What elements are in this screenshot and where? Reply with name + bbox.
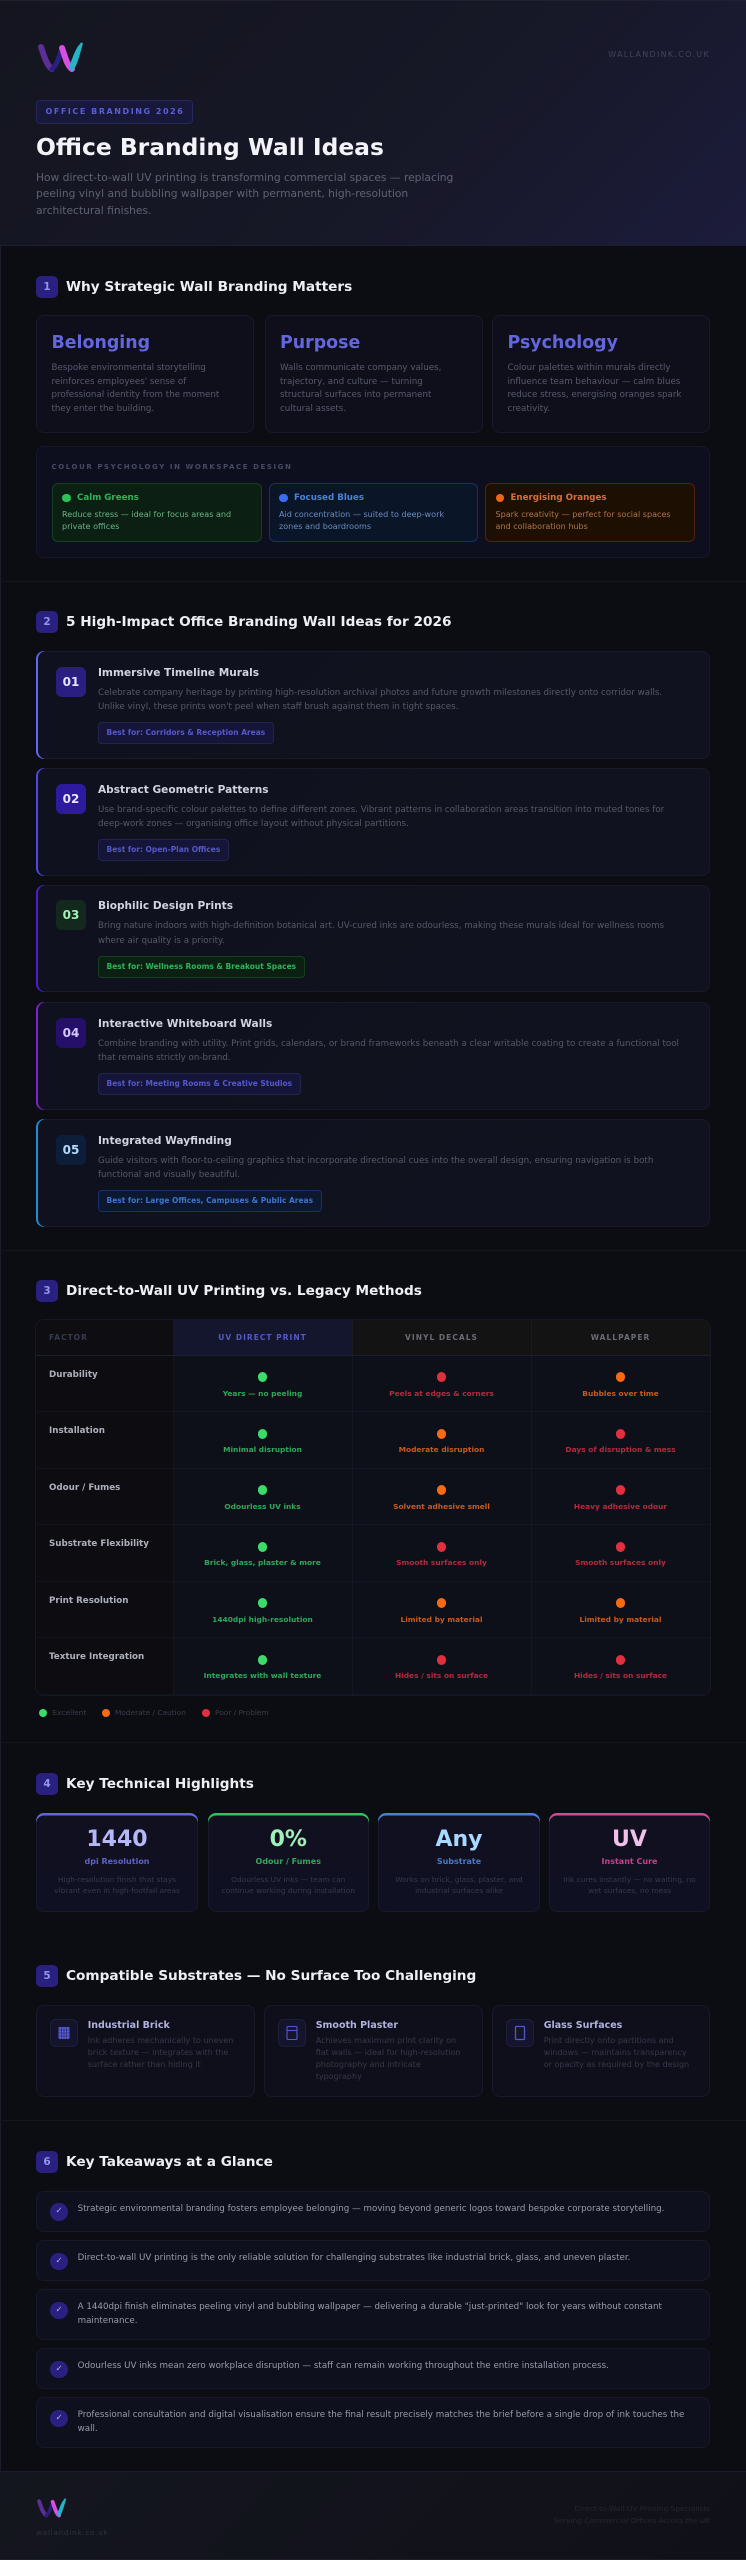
factor: Texture Integration — [49, 1652, 144, 1662]
vinyl cell: Smooth surfaces only — [396, 1558, 487, 1567]
title: Office Branding Wall Ideas — [36, 133, 384, 161]
card title: Belonging — [52, 333, 150, 353]
green dot — [62, 494, 70, 502]
legend dot poor — [202, 1709, 210, 1717]
takeaway 3 — [36, 2289, 710, 2340]
swatch text: zones and boardrooms — [279, 522, 371, 530]
idea body: Use brand-specific colour palettes to define different zones. Vibrant patterns in collaboration areas transition into muted tones for — [98, 805, 664, 815]
best-for pill: Best for: Meeting Rooms & Creative Studios — [106, 1079, 292, 1088]
row: durability — [36, 1356, 710, 1412]
idea body: deep-work zones — organising office layout without physical partitions. — [98, 819, 409, 829]
footer — [0, 2471, 746, 2560]
card title: Industrial Brick — [88, 2020, 170, 2031]
swatch: focused blues — [268, 483, 478, 542]
check icon: ✓ — [55, 2206, 63, 2216]
best-for pill — [98, 1073, 301, 1095]
card title: Purpose — [280, 333, 360, 353]
icon: brick grid — [50, 2019, 78, 2047]
row: installation — [36, 1412, 710, 1469]
number — [56, 784, 86, 814]
wallpaper cell — [531, 1582, 710, 1638]
card text: or opacity as required by the design — [544, 2060, 689, 2069]
card text: brick texture — integrates with the — [88, 2048, 228, 2057]
best-for pill: Best for: Large Offices, Campuses & Public Areas — [106, 1196, 313, 1205]
idea body — [98, 688, 662, 712]
check icon — [50, 2410, 68, 2427]
header: factor: FACTOR — [49, 1333, 88, 1342]
label: dpi Resolution — [84, 1857, 150, 1866]
legend text moderate: Moderate / Caution — [115, 1708, 186, 1717]
legend dot excellent — [39, 1709, 47, 1717]
label: Odour / Fumes — [256, 1857, 321, 1866]
card text: photography and intricate — [316, 2060, 421, 2069]
card body — [280, 363, 441, 414]
swatch: calm greens — [52, 483, 262, 542]
takeaway 4 — [36, 2348, 710, 2389]
vinyl cell — [352, 1525, 531, 1582]
uv cell: Brick, glass, plaster & more — [204, 1558, 321, 1567]
uv cell — [173, 1582, 352, 1638]
substrate card: plaster — [264, 2005, 483, 2097]
number: 04 — [63, 1026, 79, 1040]
card text: surface rather than hiding it — [88, 2060, 201, 2069]
legend text poor: Poor / Problem — [215, 1708, 269, 1717]
header: uv direct print — [173, 1320, 352, 1355]
swatch text: Aid concentration — suited to deep-work — [279, 510, 444, 519]
best-for pill — [98, 956, 305, 978]
best-for pill — [98, 722, 274, 744]
panel: belonging — [36, 315, 254, 433]
takeaway text: Odourless UV inks mean zero workplace disruption — staff can remain working throughout the entire installation process. — [78, 2361, 609, 2371]
card title: Smooth Plaster — [316, 2020, 398, 2031]
wallpaper cell — [531, 1638, 710, 1695]
heading text: Direct-to-Wall UV Printing vs. Legacy Methods — [66, 1283, 422, 1299]
swatch text: and collaboration hubs — [496, 522, 588, 530]
check icon: ✓ — [55, 2304, 63, 2314]
wallpaper cell: Days of disruption & mess — [565, 1445, 676, 1454]
check icon — [50, 2360, 68, 2378]
section 2 heading — [36, 611, 451, 633]
value: UV — [612, 1826, 647, 1852]
number badge — [36, 2151, 58, 2173]
vinyl cell: Moderate disruption — [399, 1445, 484, 1454]
legend text excellent: Excellent — [52, 1708, 86, 1717]
idea title: Interactive Whiteboard Walls — [98, 1018, 272, 1030]
idea title: Abstract Geometric Patterns — [98, 784, 269, 796]
header: wallpaper — [531, 1320, 710, 1355]
best-for pill: Best for: Wellness Rooms & Breakout Spaces — [106, 962, 296, 970]
stat: 0% odour — [208, 1812, 369, 1912]
row: print resolution — [36, 1582, 710, 1638]
idea body — [98, 1039, 679, 1063]
number — [56, 1018, 86, 1048]
subtitle: How direct-to-wall UV printing is transforming commercial spaces — replacing — [36, 171, 453, 184]
card text — [88, 2036, 233, 2069]
number — [56, 900, 86, 930]
table header row — [36, 1320, 710, 1356]
idea body: Celebrate company heritage by printing high-resolution archival photos and future growth milestones directly onto corridor walls. — [98, 688, 662, 698]
uv cell — [173, 1525, 352, 1582]
number badge — [36, 276, 58, 298]
idea body: Guide visitors with floor-to-ceiling graphics that incorporate directional cues into the overall design, ensuring navigation is both — [98, 1156, 653, 1166]
check icon — [50, 2203, 68, 2221]
card title: Psychology — [508, 333, 618, 353]
heading text: 5 High-Impact Office Branding Wall Ideas for 2026 — [66, 614, 451, 630]
label: Instant Cure — [602, 1857, 657, 1866]
uv cell — [173, 1638, 352, 1695]
description — [222, 1875, 355, 1895]
subtitle — [36, 171, 453, 217]
uv cell: Minimal disruption — [223, 1445, 302, 1454]
idea card 04 — [36, 1002, 710, 1110]
number badge — [36, 1280, 58, 1302]
number badge: 2 — [43, 616, 51, 628]
uv cell — [173, 1469, 352, 1525]
check icon — [50, 2252, 68, 2270]
check icon: ✓ — [55, 2412, 63, 2422]
wallpaper cell: Smooth surfaces only — [575, 1558, 666, 1567]
vinyl cell: Limited by material — [400, 1615, 483, 1624]
best-for pill: Best for: Corridors & Reception Areas — [106, 728, 265, 737]
factor: Print Resolution — [49, 1596, 128, 1606]
subtitle: peeling vinyl and bubbling wallpaper with permanent, high-resolution — [36, 187, 408, 200]
vinyl cell — [352, 1469, 531, 1525]
header: wallpaper: WALLPAPER — [591, 1333, 650, 1342]
uv cell: Integrates with wall texture — [204, 1671, 321, 1680]
number badge: 5 — [43, 1970, 51, 1982]
description — [395, 1875, 523, 1895]
card body: trajectory, and culture — turning — [280, 377, 423, 387]
value: 1440 — [86, 1826, 148, 1852]
heading text: Compatible Substrates — No Surface Too Challenging — [66, 1968, 476, 1984]
icon: footer logo — [37, 2498, 66, 2518]
substrate card: brick — [36, 2005, 255, 2097]
wallpaper cell: Heavy adhesive odour — [574, 1502, 667, 1511]
vinyl cell — [352, 1582, 531, 1638]
factor: Installation — [49, 1426, 105, 1436]
legend dot moderate — [102, 1709, 110, 1717]
wallpaper cell: Hides / sits on surface — [574, 1671, 667, 1680]
uv cell: Odourless UV inks — [224, 1502, 301, 1511]
description — [563, 1875, 696, 1895]
card text: flat walls — ideal for high-resolution — [316, 2048, 460, 2057]
value: Any — [435, 1826, 483, 1852]
number: 05 — [63, 1143, 79, 1157]
takeaway 1 — [36, 2191, 710, 2232]
description: Odourless UV inks — team can — [231, 1875, 345, 1884]
section 3 heading — [36, 1280, 422, 1302]
check icon — [50, 2302, 68, 2319]
number badge — [36, 1773, 58, 1795]
factor: Durability — [49, 1370, 98, 1380]
description: Works on brick, glass, plaster, and — [395, 1875, 523, 1884]
idea body: Unlike vinyl, these prints won't peel when staff brush against them in tight spaces. — [98, 702, 458, 712]
website label: WALLANDINK.CO.UK — [608, 50, 710, 59]
number badge: 1 — [43, 281, 51, 293]
description: industrial surfaces alike — [415, 1886, 503, 1895]
check icon: ✓ — [55, 2364, 63, 2374]
best-for pill — [98, 1190, 322, 1212]
swatch title: Energising Oranges — [510, 493, 607, 503]
vinyl cell — [352, 1412, 531, 1469]
card body: they enter the building. — [52, 404, 154, 414]
number badge — [36, 1965, 58, 1987]
number badge: 6 — [43, 2156, 51, 2168]
description: Ink cures instantly — no waiting, no — [563, 1875, 696, 1884]
stat: uv instant cure — [549, 1812, 710, 1912]
card text — [316, 2036, 460, 2081]
row: texture integration — [36, 1638, 710, 1695]
takeaway text — [78, 2410, 684, 2434]
row: odour — [36, 1469, 710, 1525]
factor: Odour / Fumes — [49, 1483, 120, 1493]
swatch text — [279, 510, 444, 530]
idea card 05 — [36, 1119, 710, 1226]
card body: Bespoke environmental storytelling — [52, 363, 206, 373]
footer tagline: Direct-to-Wall UV Printing Specialists — [574, 2504, 710, 2513]
card text: Ink adheres mechanically to uneven — [88, 2036, 233, 2045]
orange dot — [496, 494, 504, 502]
check icon: ✓ — [55, 2256, 63, 2266]
blue dot — [279, 494, 288, 502]
swatch title: Calm Greens — [77, 493, 139, 503]
takeaway 2 — [36, 2240, 710, 2281]
card body — [52, 363, 220, 414]
description: wet surfaces, no mess — [588, 1886, 671, 1895]
card body: cultural assets. — [280, 404, 346, 414]
vinyl cell: Hides / sits on surface — [395, 1671, 488, 1680]
uv cell: Years — no peeling — [223, 1389, 302, 1398]
swatch text: private offices — [62, 522, 119, 530]
number — [56, 1135, 86, 1165]
card body: Colour palettes within murals directly — [508, 363, 671, 373]
swatch title: Focused Blues — [294, 493, 364, 503]
idea body — [98, 921, 664, 946]
section 1 heading — [36, 276, 352, 298]
idea title: Integrated Wayfinding — [98, 1134, 232, 1146]
idea title: Biophilic Design Prints — [98, 900, 233, 912]
number — [56, 667, 86, 697]
section 4 heading — [36, 1773, 254, 1795]
icon: glass pane — [506, 2019, 534, 2047]
stat: any substrate — [378, 1812, 540, 1912]
wallpaper cell — [531, 1525, 710, 1582]
number: 02 — [63, 792, 79, 806]
number badge: 4 — [43, 1778, 51, 1790]
swatch: energising oranges — [485, 483, 695, 542]
footer tagline: Serving Commercial Offices Across the UK — [554, 2516, 710, 2525]
idea body: Combine branding with utility. Print grids, calendars, or brand frameworks beneath a clear writable coating to create a functional tool — [98, 1039, 679, 1049]
card body: professional identity from the moment — [52, 390, 219, 400]
swatch text: Reduce stress — ideal for focus areas and — [62, 510, 231, 519]
takeaway text: A 1440dpi finish eliminates peeling vinyl and bubbling wallpaper — delivering a durable "just-printed" look for years without constant — [78, 2302, 662, 2312]
card body: creativity. — [508, 404, 550, 414]
section 5 heading — [36, 1965, 476, 1987]
header banner — [0, 0, 746, 246]
number badge — [36, 611, 58, 633]
row: substrate flexibility — [36, 1525, 710, 1582]
icon: plaster panel — [278, 2019, 306, 2047]
panel: purpose — [264, 315, 482, 433]
idea body — [98, 1156, 653, 1180]
takeaway text: wall. — [78, 2424, 98, 2434]
takeaway text: Strategic environmental branding fosters employee belonging — moving beyond generic logos toward bespoke corporate storytelling. — [78, 2204, 664, 2214]
idea body — [98, 805, 664, 829]
stat: 1440 dpi — [36, 1812, 198, 1912]
number: 01 — [63, 675, 79, 689]
header: vinyl decals: VINYL DECALS — [405, 1333, 478, 1342]
wallpaper cell — [531, 1469, 710, 1525]
card text: Print directly onto partitions and — [544, 2036, 674, 2045]
panel: colour psychology — [36, 446, 710, 558]
card body: reinforces employees' sense of — [52, 377, 186, 387]
card body: influence team behaviour — calm blues — [508, 377, 680, 387]
idea card 02 — [36, 768, 710, 876]
takeaway text — [78, 2302, 662, 2326]
footer site: wallandink.co.uk — [36, 2528, 108, 2537]
description — [54, 1875, 180, 1895]
comparison table — [36, 1320, 710, 1695]
idea body: Bring nature indoors with high-definition botanical art. UV-cured inks are odourless, making these murals ideal for wellness rooms — [98, 921, 664, 931]
factor: Substrate Flexibility — [49, 1539, 149, 1549]
substrate card: glass — [492, 2005, 710, 2097]
card text: Achieves maximum print clarity on — [316, 2036, 456, 2045]
takeaway text: Professional consultation and digital visualisation ensure the final result precisely matches the brief before a single drop of ink touches the — [78, 2410, 684, 2420]
heading text: Why Strategic Wall Branding Matters — [66, 279, 352, 295]
wallpaper cell: Limited by material — [579, 1615, 662, 1624]
header: uv direct print: UV DIRECT PRINT — [218, 1333, 307, 1342]
takeaway text: Direct-to-wall UV printing is the only reliable solution for challenging substrates like industrial brick, glass, and uneven plaster. — [78, 2253, 630, 2263]
panel: psychology — [492, 315, 710, 433]
description: continue working during installation — [222, 1886, 355, 1895]
vinyl cell — [352, 1638, 531, 1695]
idea title: Immersive Timeline Murals — [98, 666, 259, 678]
wallpaper cell — [531, 1356, 710, 1412]
idea body: functional and visually beautiful. — [98, 1170, 240, 1180]
swatch text — [62, 510, 231, 530]
description: High-resolution finish that stays — [58, 1875, 176, 1884]
takeaway 5 — [36, 2397, 710, 2448]
wallpaper cell — [531, 1412, 710, 1469]
vinyl cell: Solvent adhesive smell — [393, 1502, 490, 1511]
card title: Glass Surfaces — [544, 2020, 622, 2031]
uv cell — [173, 1356, 352, 1412]
vinyl cell: Peels at edges & corners — [389, 1389, 494, 1398]
icon: wall and ink logo — [38, 42, 83, 72]
heading text: Key Technical Highlights — [66, 1776, 254, 1792]
card text: typography — [316, 2072, 362, 2081]
tag: office branding 2026: OFFICE BRANDING 2026 — [46, 107, 184, 116]
idea card 01 — [36, 651, 710, 758]
footer tagline — [554, 2504, 710, 2525]
card body: Walls communicate company values, — [280, 363, 441, 373]
vinyl cell — [352, 1356, 531, 1412]
header: vinyl decals — [352, 1320, 531, 1355]
heading text: Key Takeaways at a Glance — [66, 2154, 273, 2170]
panel label: COLOUR PSYCHOLOGY IN WORKSPACE DESIGN — [52, 463, 292, 471]
idea card 03 — [36, 884, 710, 992]
best-for pill — [98, 839, 229, 861]
value: 0% — [270, 1826, 307, 1852]
idea body: that remains strictly on-brand. — [98, 1053, 231, 1063]
card body: reduce stress, energising oranges spark — [508, 390, 681, 400]
label: Substrate — [437, 1857, 481, 1866]
subtitle: architectural finishes. — [36, 204, 151, 217]
section 6 heading — [36, 2151, 273, 2173]
legend — [39, 1708, 269, 1717]
wallpaper cell: Bubbles over time — [582, 1389, 659, 1398]
card text — [544, 2036, 689, 2069]
best-for pill: Best for: Open-Plan Offices — [106, 845, 220, 854]
swatch text — [496, 510, 671, 530]
number: 03 — [63, 908, 79, 922]
uv cell — [173, 1412, 352, 1469]
card body: structural surfaces into permanent — [280, 390, 431, 400]
uv cell: 1440dpi high-resolution — [212, 1615, 313, 1624]
description: vibrant even in high-footfall areas — [54, 1886, 180, 1895]
idea body: where air quality is a priority. — [98, 936, 225, 946]
number badge: 3 — [43, 1285, 51, 1297]
takeaway text: maintenance. — [78, 2316, 137, 2326]
card text: windows — maintains transparency — [544, 2048, 687, 2057]
swatch text: Spark creativity — perfect for social spaces — [496, 510, 671, 519]
tag: office branding 2026 — [36, 100, 193, 124]
card body — [508, 363, 682, 414]
